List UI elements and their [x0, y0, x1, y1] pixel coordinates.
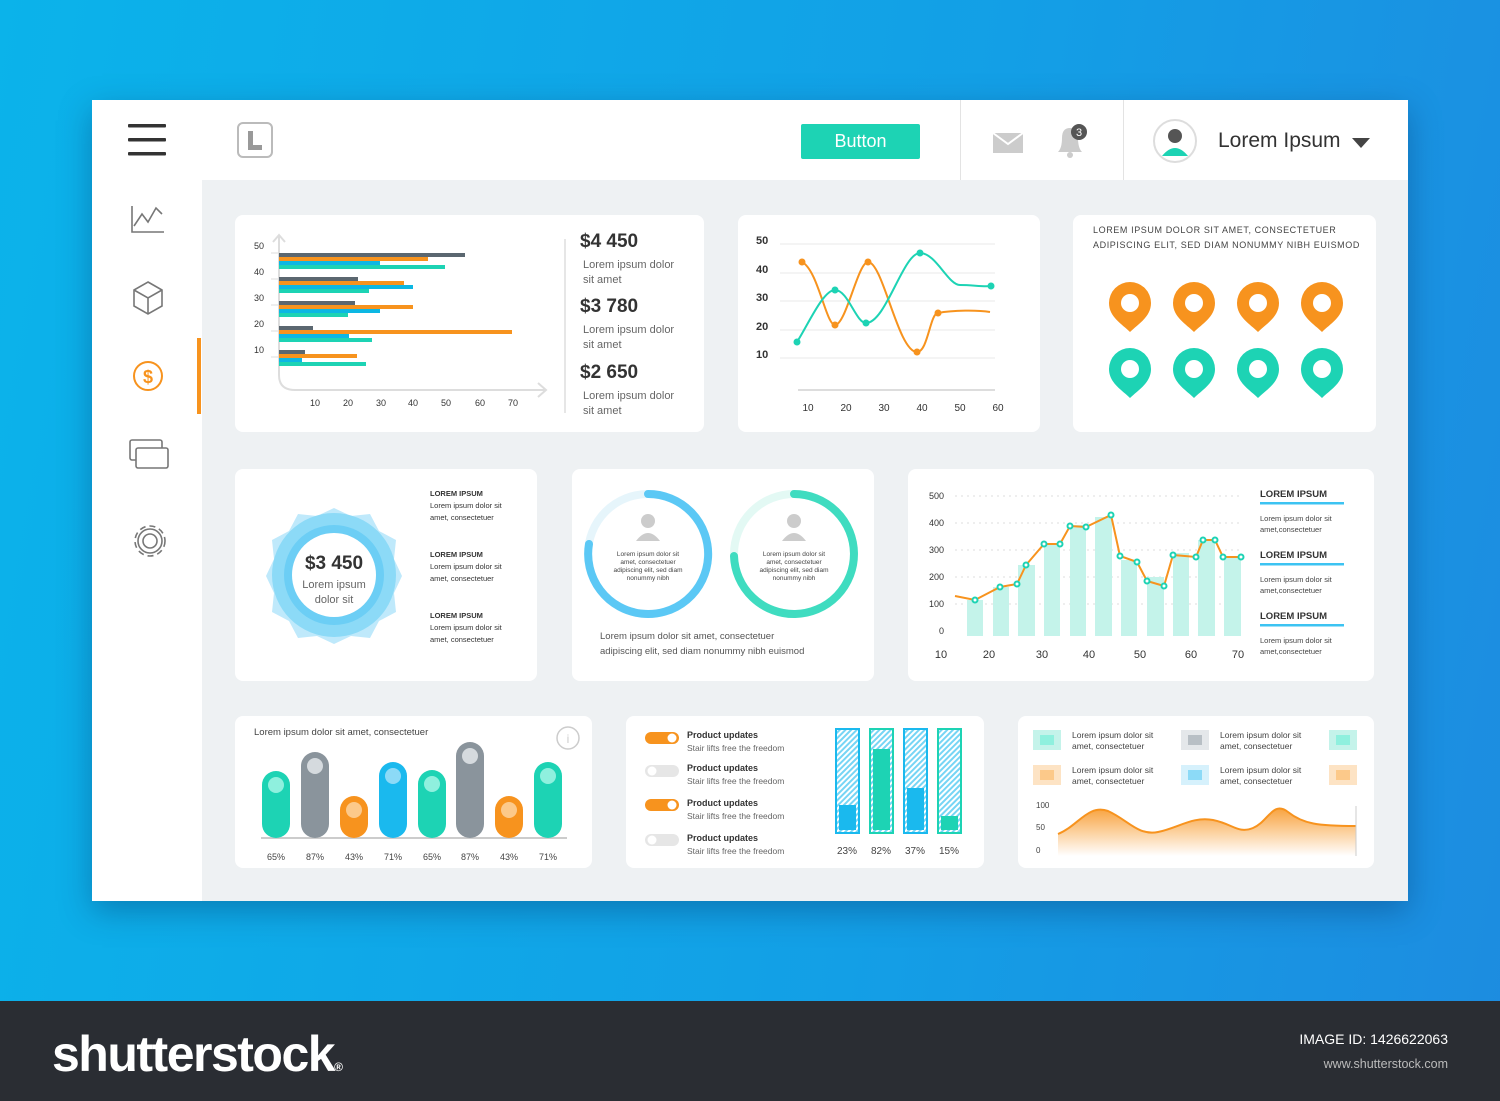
badge text list	[430, 489, 502, 644]
card: capsule bars: 43%	[345, 852, 363, 862]
card: bar + line combo chart: Lorem ipsum dolor sit	[1260, 514, 1333, 523]
user avatar and name	[1153, 119, 1370, 163]
card: legend and area chart: amet, consectetuer	[1072, 741, 1144, 751]
card: line chart: 30	[756, 292, 768, 304]
stats text: sit amet	[583, 274, 622, 286]
card: toggles and progress bars: Stair lifts free the freedom	[687, 811, 784, 821]
card: badge: $3 450	[305, 553, 363, 574]
card: horizontal bar chart: 50	[254, 241, 264, 251]
badge text list: Lorem ipsum dolor sit	[430, 623, 502, 632]
icon: bell	[1058, 124, 1087, 158]
icon: gear	[135, 526, 165, 556]
active indicator	[197, 338, 201, 414]
card: horizontal bar chart: 20	[254, 319, 264, 329]
card: toggles and progress bars: Product updates	[687, 833, 758, 843]
icon: chart	[132, 206, 164, 232]
card: capsule bars	[235, 716, 592, 868]
card: toggles and progress bars	[626, 716, 984, 868]
footer bar	[0, 1001, 1500, 1101]
card: toggles and progress bars: Product updates	[687, 798, 758, 808]
card: badge: dolor sit	[315, 594, 353, 606]
badge text list: amet, consectetuer	[430, 635, 494, 644]
card: line chart: 10	[802, 403, 814, 414]
card: donut rings: amet, consectetuer	[620, 559, 676, 566]
dashboard frame	[92, 100, 1408, 901]
stats text: Lorem ipsum dolor	[583, 324, 674, 336]
card: bar + line combo chart: amet,consectetuer	[1260, 647, 1322, 656]
card: capsule bars: 65%	[423, 852, 441, 862]
card: legend and area chart: 50	[1036, 823, 1045, 832]
card: bar + line combo chart: 60	[1185, 649, 1197, 661]
card: donut rings: Lorem ipsum dolor sit	[763, 551, 825, 558]
card: donut rings: nonummy nibh	[627, 575, 670, 582]
card: donut rings: nonummy nibh	[773, 575, 816, 582]
card: legend and area chart: Lorem ipsum dolor sit	[1220, 730, 1302, 740]
card: bar + line combo chart: 30	[1036, 649, 1048, 661]
card: bar + line combo chart: amet,consectetuer	[1260, 525, 1322, 534]
image id: IMAGE ID: 1426622063	[1299, 1031, 1448, 1047]
card: line chart: 20	[840, 403, 852, 414]
card: legend and area chart: Lorem ipsum dolor sit	[1072, 730, 1154, 740]
card: donut rings	[572, 469, 874, 681]
card: badge	[235, 469, 537, 681]
card: legend and area chart: 100	[1036, 801, 1050, 810]
icon: cube	[134, 282, 162, 314]
user avatar and name: Lorem Ipsum	[1218, 129, 1341, 152]
card: capsule bars: 87%	[306, 852, 324, 862]
card: line chart: 20	[756, 321, 768, 333]
card: toggles and progress bars: Stair lifts free the freedom	[687, 776, 784, 786]
card: line chart: 60	[992, 403, 1004, 414]
card: toggles and progress bars: Product updates	[687, 730, 758, 740]
badge text list: amet, consectetuer LOREM IPSUM	[430, 574, 494, 620]
card: bar + line combo chart: 200	[929, 572, 944, 582]
card: legend and area chart: 0	[1036, 846, 1041, 855]
icon: mail	[993, 133, 1023, 153]
card: line chart: 40	[916, 403, 928, 414]
card: map pins: LOREM IPSUM DOLOR SIT AMET, CONSECTETUER ADIPISCING ELIT, SED DIAM NONUMMY NIBH EUISMOD	[1093, 225, 1360, 250]
card: donut rings: Lorem ipsum dolor sit	[617, 551, 679, 558]
top bar	[202, 100, 1408, 180]
icon: dollar: $	[143, 367, 153, 387]
card: bar + line combo chart: 50	[1134, 649, 1146, 661]
card: horizontal bar chart: 30	[254, 293, 264, 303]
card: donut rings: adipiscing elit, sed diam	[759, 567, 829, 574]
stats text: sit amet	[583, 339, 622, 351]
badge text list: Lorem ipsum dolor sit	[430, 501, 502, 510]
card: bar + line combo chart: LOREM IPSUM	[1260, 611, 1327, 622]
icon: bell: 3	[1076, 127, 1082, 139]
card: horizontal bar chart: 10	[310, 398, 320, 408]
card: horizontal bar chart: 40	[254, 267, 264, 277]
card: line chart: 50	[954, 403, 966, 414]
card: bar + line combo chart: Lorem ipsum dolor sit	[1260, 575, 1333, 584]
card: bar + line combo chart: Lorem ipsum dolor sit	[1260, 636, 1333, 645]
card: bar + line combo chart: 10	[935, 649, 947, 661]
card: line chart: 40	[756, 264, 768, 276]
card: bar + line combo chart: 500	[929, 491, 944, 501]
stats text: Lorem ipsum dolor	[583, 390, 674, 402]
card: donut rings: amet, consectetuer	[766, 559, 822, 566]
card: bar + line combo chart: 40	[1083, 649, 1095, 661]
card: horizontal bar chart: 50	[441, 398, 451, 408]
card: capsule bars: Lorem ipsum dolor sit amet, consectetuer	[254, 727, 428, 738]
card: bar + line combo chart: LOREM IPSUM	[1260, 489, 1327, 500]
stats text: $4 450	[580, 231, 638, 252]
card: line chart: 10	[756, 349, 768, 361]
icon: cards	[130, 440, 168, 468]
icon: dollar	[134, 362, 162, 390]
card: donut rings: Lorem ipsum dolor sit amet, consectetuer	[600, 631, 774, 642]
card: line chart	[738, 215, 1040, 432]
card: line chart: 50	[756, 235, 768, 247]
card: bar + line combo chart: 100	[929, 599, 944, 609]
card: map pins	[1073, 215, 1376, 432]
card: toggles and progress bars: 82%	[871, 846, 891, 857]
card: capsule bars: i	[567, 732, 569, 746]
card: horizontal bar chart	[235, 215, 704, 432]
card: badge: Lorem ipsum	[302, 579, 366, 591]
card: donut rings: adipiscing elit, sed diam	[613, 567, 683, 574]
stats text: Lorem ipsum dolor	[583, 259, 674, 271]
card: toggles and progress bars: Product updates	[687, 763, 758, 773]
card: horizontal bar chart: 10	[254, 345, 264, 355]
card: toggles and progress bars: 37%	[905, 846, 925, 857]
card: bar + line combo chart	[908, 469, 1374, 681]
button: Button	[834, 131, 887, 151]
card: bar + line combo chart: 300	[929, 545, 944, 555]
card: bar + line combo chart: 70	[1232, 649, 1244, 661]
card: legend and area chart: amet, consectetuer	[1220, 741, 1292, 751]
card: horizontal bar chart: 30	[376, 398, 386, 408]
logo	[237, 122, 273, 158]
card: horizontal bar chart: 60	[475, 398, 485, 408]
card: horizontal bar chart: 70	[508, 398, 518, 408]
card: legend and area chart: amet, consectetuer	[1220, 776, 1292, 786]
card: donut rings: adipiscing elit, sed diam nonummy nibh euismod	[600, 646, 804, 657]
footer logo: shutterstock®	[52, 1026, 341, 1082]
card: capsule bars: 65%	[267, 852, 285, 862]
card: capsule bars: 71%	[384, 852, 402, 862]
card: legend and area chart	[1018, 716, 1374, 868]
card: horizontal bar chart: 40	[408, 398, 418, 408]
card: capsule bars: 71%	[539, 852, 557, 862]
card: legend and area chart: Lorem ipsum dolor sit	[1220, 765, 1302, 775]
card: bar + line combo chart: LOREM IPSUM	[1260, 550, 1327, 561]
card: toggles and progress bars: Stair lifts free the freedom	[687, 743, 784, 753]
card: legend and area chart: amet, consectetuer	[1072, 776, 1144, 786]
card: toggles and progress bars: Stair lifts free the freedom	[687, 846, 784, 856]
card: capsule bars: 43%	[500, 852, 518, 862]
stats text: $2 650	[580, 362, 638, 383]
card: bar + line combo chart: 0	[939, 626, 944, 636]
footer bar: www.shutterstock.com	[1324, 1057, 1448, 1071]
card: bar + line combo chart: 400	[929, 518, 944, 528]
card: bar + line combo chart: 20	[983, 649, 995, 661]
sidebar	[92, 100, 202, 901]
stats text: sit amet	[583, 405, 622, 417]
card: horizontal bar chart: 20	[343, 398, 353, 408]
icon: menu	[128, 124, 166, 156]
badge text list: amet, consectetuer LOREM IPSUM	[430, 513, 494, 559]
card: legend and area chart: Lorem ipsum dolor sit	[1072, 765, 1154, 775]
card: capsule bars: 87%	[461, 852, 479, 862]
card: toggles and progress bars: 23%	[837, 846, 857, 857]
card: bar + line combo chart: amet,consectetuer	[1260, 586, 1322, 595]
stats text	[580, 231, 674, 417]
card: toggles and progress bars: 15%	[939, 846, 959, 857]
card: line chart: 30	[878, 403, 890, 414]
badge text list: LOREM IPSUM	[430, 489, 483, 498]
button	[801, 124, 920, 159]
badge text list: Lorem ipsum dolor sit	[430, 562, 502, 571]
stats text: $3 780	[580, 296, 638, 317]
